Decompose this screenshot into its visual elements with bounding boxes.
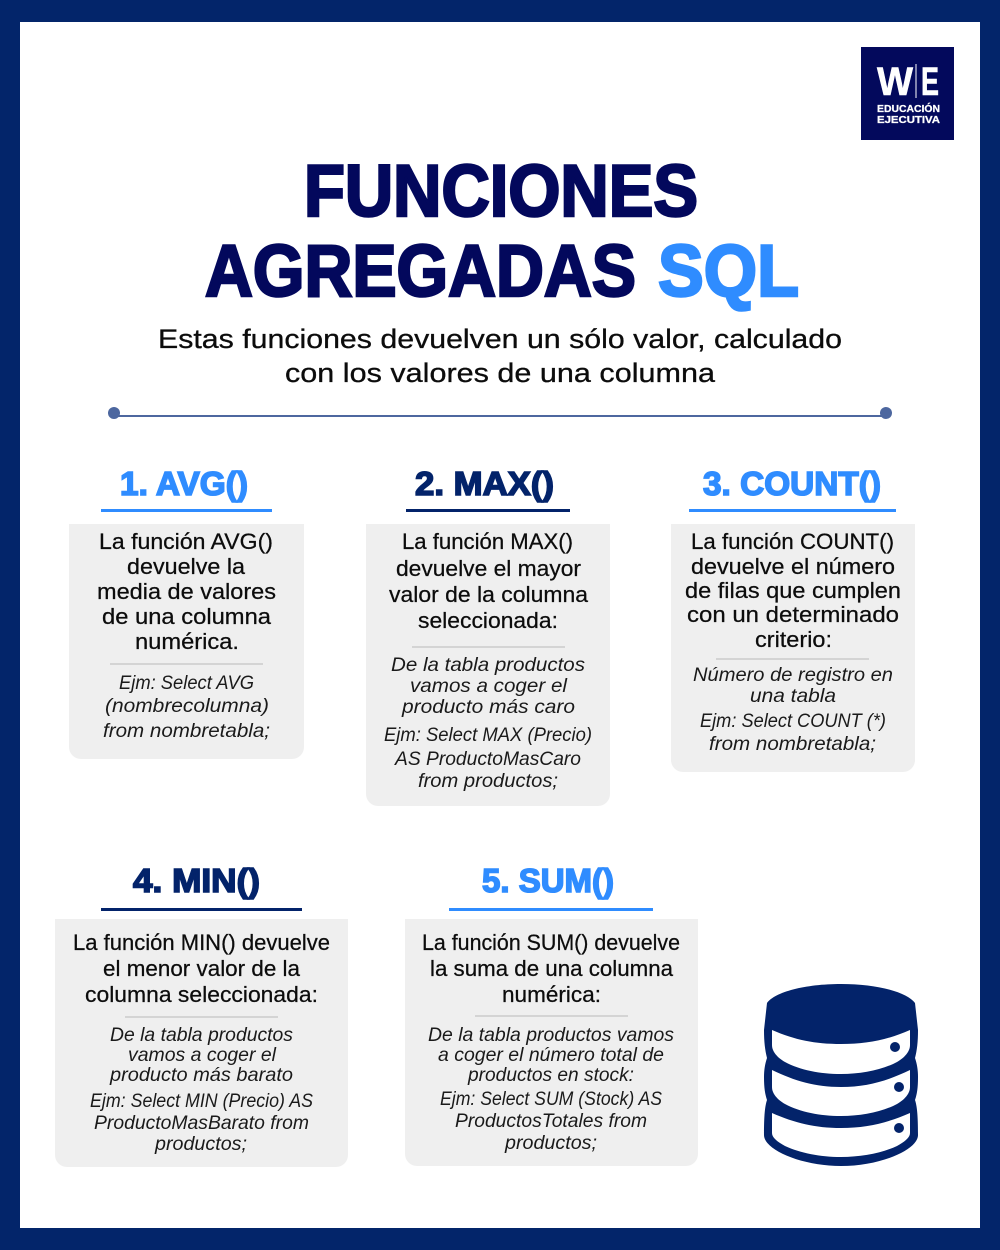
- panel: 4. MIN(): Ejm: Select MIN (Precio) AS: [90, 1091, 313, 1112]
- title: FUNCIONES: [304, 151, 698, 232]
- logo: WE Educación Ejecutiva: W: [877, 60, 913, 104]
- logo: WE Educación Ejecutiva: EDUCACIÓN: [877, 102, 940, 115]
- panel: 2. MAX(): De la tabla productos: [391, 655, 586, 676]
- panel: 3. COUNT(): una tabla: [750, 686, 836, 707]
- panel: 2. MAX(): devuelve el mayor: [396, 556, 581, 581]
- panel: 2. MAX(): AS ProductoMasCaro: [394, 749, 581, 770]
- panel: 1. AVG(): Ejm: Select AVG: [119, 673, 254, 694]
- panel: 3. COUNT(): from nombretabla;: [709, 734, 876, 755]
- panel: 1. AVG(): media de valores: [97, 579, 276, 604]
- panel: 2. MAX(): [366, 465, 610, 806]
- panel: 4. MIN(): vamos a coger el: [128, 1045, 277, 1066]
- panel: 2. MAX(): La función MAX(): [402, 529, 573, 554]
- subtitle: con los valores de una columna: [285, 358, 715, 388]
- panel: 3. COUNT(): Ejm: Select COUNT (*): [700, 711, 886, 732]
- panel: 5. SUM(): la suma de una columna: [430, 956, 674, 981]
- logo: WE Educación Ejecutiva: EJECUTIVA: [877, 114, 940, 126]
- panel: 4. MIN(): 4. MIN(): [133, 862, 260, 899]
- panel: 3. COUNT(): Número de registro en: [693, 665, 893, 686]
- panel: 5. SUM(): numérica:: [502, 982, 601, 1007]
- panel: 3. COUNT(): con un determinado: [687, 602, 899, 627]
- panel: 5. SUM(): productos en stock:: [467, 1065, 634, 1086]
- panel: 5. SUM(): productos;: [504, 1133, 597, 1154]
- panel: 2. MAX(): from productos;: [418, 771, 558, 792]
- panel: 5. SUM(): Ejm: Select SUM (Stock) AS: [440, 1089, 662, 1110]
- panel: 5. SUM(): De la tabla productos vamos: [428, 1025, 675, 1046]
- panel: 1. AVG(): 1. AVG(): [120, 465, 248, 502]
- icon: database: [764, 984, 918, 1166]
- title: SQL: [658, 231, 799, 312]
- panel: 1. AVG(): numérica.: [135, 629, 239, 654]
- panel: 1. AVG(): (nombrecolumna): [105, 696, 269, 717]
- panel: 5. SUM(): a coger el número total de: [438, 1045, 664, 1066]
- panel: 1. AVG(): from nombretabla;: [103, 721, 270, 742]
- panel: 4. MIN(): producto más barato: [109, 1065, 293, 1086]
- panel: 1. AVG(): devuelve la: [127, 554, 246, 579]
- panel: 4. MIN(): [55, 862, 348, 1167]
- panel: 2. MAX(): Ejm: Select MAX (Precio): [384, 725, 592, 746]
- panel: 3. COUNT(): 3. COUNT(): [703, 465, 881, 502]
- panel: 3. COUNT(): La función COUNT(): [691, 529, 894, 554]
- panel: 3. COUNT(): de filas que cumplen: [685, 578, 901, 603]
- panel: 2. MAX(): producto más caro: [401, 697, 575, 718]
- panel: 5. SUM(): 5. SUM(): [482, 862, 614, 899]
- subtitle: Estas funciones devuelven un sólo valor, calculado: [158, 324, 842, 354]
- panel: 2. MAX(): valor de la columna: [389, 582, 589, 607]
- panel: 5. SUM(): [405, 862, 698, 1166]
- panel: 4. MIN(): La función MIN() devuelve: [73, 930, 330, 955]
- logo: WE Educación Ejecutiva: [861, 47, 954, 140]
- panel: 1. AVG(): [69, 465, 304, 759]
- panel: 5. SUM(): ProductosTotales from: [455, 1111, 647, 1132]
- panel: 5. SUM(): La función SUM() devuelve: [422, 930, 680, 955]
- panel: 3. COUNT(): criterio:: [755, 627, 832, 652]
- panel: 1. AVG(): de una columna: [102, 604, 272, 629]
- subtitle: [158, 324, 842, 388]
- panel: 4. MIN(): columna seleccionada:: [85, 982, 318, 1007]
- title: AGREGADAS: [205, 231, 636, 312]
- panel: 4. MIN(): De la tabla productos: [110, 1025, 294, 1046]
- panel: 2. MAX(): 2. MAX(): [415, 465, 554, 502]
- title: [205, 151, 799, 312]
- panel: 1. AVG(): La función AVG(): [99, 529, 273, 554]
- panel: 4. MIN(): ProductoMasBarato from: [94, 1113, 309, 1134]
- panel: 2. MAX(): seleccionada:: [418, 608, 558, 633]
- panel: 4. MIN(): el menor valor de la: [103, 956, 301, 981]
- panel: 3. COUNT(): devuelve el número: [691, 554, 895, 579]
- panel: 2. MAX(): vamos a coger el: [410, 676, 568, 697]
- logo: WE Educación Ejecutiva: E: [921, 60, 939, 104]
- panel: 4. MIN(): productos;: [154, 1134, 247, 1155]
- panel: 3. COUNT(): [671, 465, 915, 772]
